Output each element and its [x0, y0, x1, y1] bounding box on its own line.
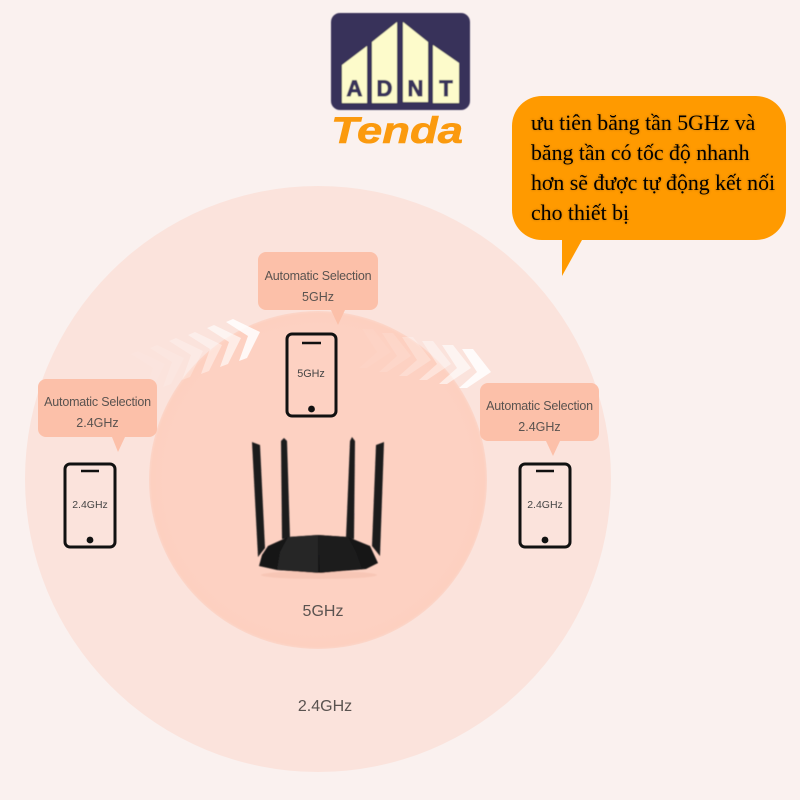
- circle: 5GHz coverage zone: [149, 311, 487, 649]
- icon: phone 5GHz: [287, 334, 336, 416]
- icon: phone 2.4GHz right: [520, 464, 570, 547]
- callout: orange speech bubble: băng tần có tốc độ nhanh: [531, 141, 750, 165]
- label: Automatic Selection 5GHz: 5GHz: [302, 290, 334, 304]
- callout: orange speech bubble: cho thiết bị: [531, 201, 629, 225]
- circle: 2.4GHz coverage zone: [25, 186, 611, 772]
- callout: orange speech bubble: cho thiết bị: [531, 201, 629, 225]
- label: Automatic Selection 2.4GHz left: 2.4GHz: [76, 416, 119, 430]
- label: Automatic Selection 2.4GHz left: [38, 379, 157, 452]
- callout: orange speech bubble: [512, 96, 786, 276]
- logo: Tenda wordmark: Tenda: [331, 110, 463, 151]
- callout: orange speech bubble: băng tần có tốc độ nhanh: [531, 141, 750, 165]
- label: 2.4GHz zone: 2.4GHz: [298, 698, 352, 715]
- label: Automatic Selection 2.4GHz right: Automatic Selection: [486, 399, 593, 413]
- callout: orange speech bubble: hơn sẽ được tự động kết nối: [531, 171, 775, 195]
- label: Automatic Selection 2.4GHz right: [480, 383, 599, 456]
- label: 5GHz zone: 5GHz: [303, 603, 343, 620]
- label: Automatic Selection 2.4GHz right: 2.4GHz: [518, 420, 561, 434]
- callout: orange speech bubble: ưu tiên băng tần 5GHz và: [531, 111, 756, 135]
- logo: ADNT: N: [408, 76, 423, 101]
- callout: orange speech bubble: ưu tiên băng tần 5GHz và: [531, 111, 756, 135]
- logo: ADNT: D: [377, 76, 392, 101]
- label: Automatic Selection 2.4GHz left: Automatic Selection: [44, 395, 151, 409]
- logo: ADNT: A: [347, 76, 363, 101]
- callout: orange speech bubble: hơn sẽ được tự động kết nối: [531, 171, 775, 195]
- label: Automatic Selection 5GHz: Automatic Selection: [265, 269, 372, 283]
- arrow: chevrons moving up toward 5GHz: [131, 319, 260, 393]
- icon: phone 2.4GHz left: 2.4GHz: [72, 499, 108, 511]
- icon: phone 5GHz: 5GHz: [297, 368, 325, 380]
- label: Automatic Selection 5GHz: [258, 252, 378, 325]
- arrow: chevrons moving down toward 2.4GHz: [359, 329, 491, 388]
- icon: phone 2.4GHz left: [65, 464, 115, 547]
- logo: ADNT: T: [439, 76, 453, 101]
- icon: black router with four antennas: [252, 437, 384, 579]
- logo: ADNT: [331, 13, 470, 110]
- icon: phone 2.4GHz right: 2.4GHz: [527, 499, 563, 511]
